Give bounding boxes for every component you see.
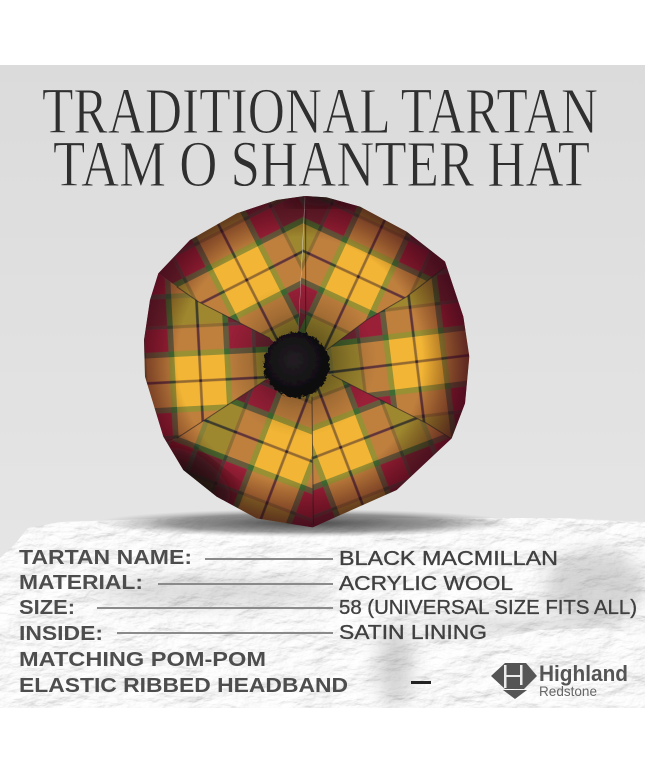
leader line 1 <box>205 558 333 560</box>
logo wordmark: Highland: Highland <box>539 661 628 686</box>
panel: top right <box>297 190 480 365</box>
icon: diamond emblem <box>491 663 537 699</box>
logo wordmark: Redstone: Redstone <box>539 683 597 699</box>
label: size: SIZE: <box>19 596 75 619</box>
label: material: MATERIAL: <box>19 571 143 594</box>
dark lower-left fold <box>166 436 240 506</box>
leader line 3 <box>97 607 333 609</box>
leader line 4 <box>117 632 333 634</box>
rock: shaded grain patches <box>95 551 645 705</box>
value: black macmillan: BLACK MACMILLAN <box>339 547 558 570</box>
rock: black crack <box>411 681 431 684</box>
leader line 2 <box>158 583 333 585</box>
value: acrylic wool: ACRYLIC WOOL <box>339 572 513 595</box>
feature: matching pom-pom: MATCHING POM-POM <box>19 648 266 671</box>
hat shading <box>144 196 470 528</box>
pom-pom <box>264 332 329 398</box>
hat fabric panels <box>144 196 470 528</box>
value: satin lining: SATIN LINING <box>339 621 487 644</box>
tartan hat <box>144 196 470 528</box>
label: tartan name: TARTAN NAME: <box>19 546 192 569</box>
logo: Highland Redstone <box>491 661 628 699</box>
panel: left <box>144 273 274 442</box>
panel: right <box>297 240 480 457</box>
spec list <box>19 546 637 697</box>
shadow under hat <box>95 509 515 537</box>
title <box>42 75 598 201</box>
label: inside: INSIDE: <box>19 622 103 645</box>
feature: elastic ribbed headband: ELASTIC RIBBED HEADBAND <box>19 674 348 697</box>
seams <box>177 210 451 525</box>
value: size: 58 (UNIVERSAL SIZE FITS ALL) <box>339 596 637 619</box>
panel: bottom right <box>297 365 480 540</box>
panel: bottom left <box>166 378 312 528</box>
rock: right block <box>494 628 620 639</box>
dark top fold <box>288 196 350 209</box>
rock plinth <box>0 516 645 708</box>
rock: main slab <box>0 516 645 708</box>
panel: top left <box>158 196 305 342</box>
